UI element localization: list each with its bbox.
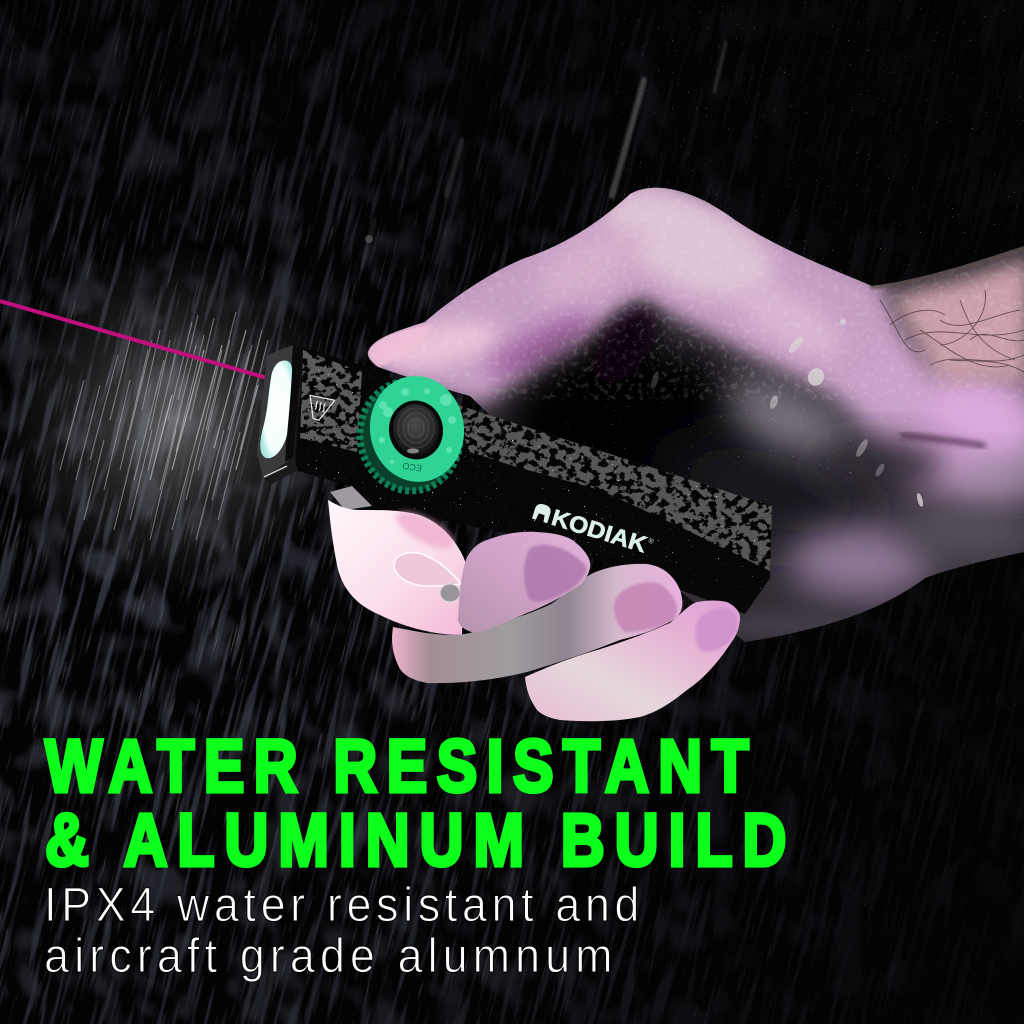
laser beam [0,301,274,380]
body [295,347,772,614]
water drops on hand [650,319,924,507]
sliver below the body [330,486,372,510]
heading [45,726,786,882]
index finger [328,500,467,635]
hand shading [360,169,1024,650]
skin mottling [368,191,1024,400]
KODIAK logo: ® [647,537,656,546]
wet metal texture [296,340,776,600]
wrist [880,362,1024,498]
ring label: ECO [402,461,422,473]
HOT warning icon [304,393,335,423]
subheading: aircraft grade alumnum [44,929,612,982]
lower palm [788,526,932,598]
water spray in front of the flashlight [0,245,350,595]
large rain streaks [362,42,726,268]
green mode ring [353,370,471,497]
fingers [328,500,740,721]
heading: WATER RESISTANT [45,726,749,808]
third finger [392,564,682,683]
thumb nail [368,324,432,367]
flashlight [257,340,776,614]
second finger [458,532,590,633]
head bezel [257,345,303,478]
nail and droplet [394,553,461,586]
KODIAK logo [531,498,657,560]
subheading: IPX4 water resistant and [44,878,639,931]
hand: palm, thumb and wrist [360,169,1024,650]
heading: & ALUMINUM BUILD [45,800,786,882]
dark palm [505,340,755,540]
subheading [44,878,639,982]
wrist top shadow with droplets [870,248,1024,287]
KODIAK logo: KODIAK [549,504,650,558]
fourth finger [525,600,740,721]
lens [260,360,292,458]
hair on wrist [880,290,1024,372]
light upper surface [368,188,924,420]
